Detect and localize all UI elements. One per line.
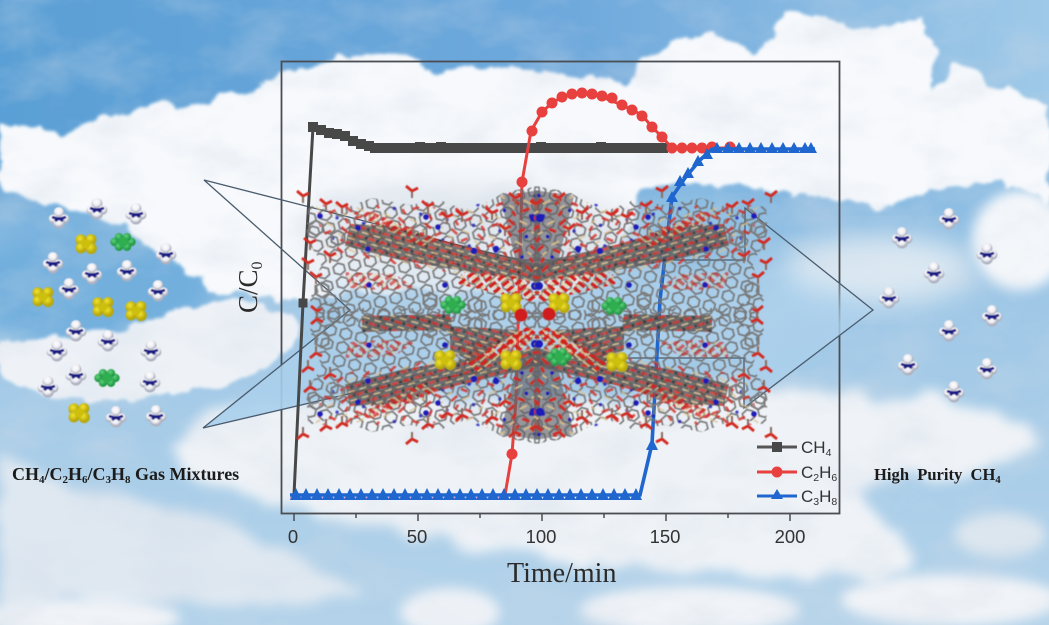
legend entry: C3H8 (757, 487, 837, 508)
x axis tick labels: 200 (775, 526, 805, 547)
x axis tick labels (288, 526, 805, 547)
left caption: 2 (62, 474, 68, 486)
x axis ticks (294, 513, 790, 521)
legend entry: CH4: CH (801, 438, 826, 457)
lower middle cloud (174, 384, 1040, 574)
shaded cloud core (300, 185, 640, 285)
legend entry: C2H6: C (801, 463, 813, 482)
left caption: Gas Mixtures (131, 464, 239, 484)
legend entry: CH4 (757, 438, 832, 459)
chart series (290, 88, 817, 500)
legend entry: C3H8: C (801, 487, 813, 506)
right caption: 4 (995, 475, 1001, 486)
bottom left cloud (0, 450, 360, 607)
left caption: /C (87, 464, 106, 484)
left caption: 3 (106, 474, 112, 486)
legend entry: C2H6: 6 (831, 472, 837, 484)
x axis tick labels: 50 (407, 526, 427, 547)
series: C3H8 (290, 142, 817, 500)
x axis tick labels: 0 (288, 526, 298, 547)
legend entry: C3H8: 8 (831, 496, 837, 508)
right cloud (972, 190, 1049, 290)
bottom strip clouds (0, 598, 180, 625)
left caption: 8 (125, 474, 131, 486)
left caption: H (68, 464, 82, 484)
legend entry: C3H8: 3 (813, 496, 819, 508)
right caption: High Purity CH (874, 465, 995, 484)
series: C2H6 (505, 88, 740, 495)
pore guest molecules (434, 293, 628, 372)
legend entry: C2H6: H (819, 463, 831, 482)
x axis tick labels: 150 (650, 526, 680, 547)
y axis title: 0 (249, 261, 266, 269)
x axis tick labels: 100 (526, 526, 556, 547)
blue sky patch left (0, 223, 220, 347)
legend entry: C3H8: H (819, 487, 831, 506)
right purified methane molecules (879, 208, 1002, 402)
left caption: 4 (39, 474, 45, 486)
left caption: /C (44, 464, 62, 484)
metal-organic framework structure (297, 186, 777, 444)
left caption: H (111, 464, 125, 484)
series: CH4 (294, 122, 668, 495)
right mid cloud (785, 236, 975, 304)
y axis title: C/C (233, 269, 263, 313)
legend entry: C2H6: 2 (813, 472, 819, 484)
x axis title: Time/min (507, 558, 616, 589)
left gas mixture molecules (32, 198, 176, 428)
lower sky (0, 130, 1049, 625)
chart frame (282, 62, 840, 514)
upper cloud bank (0, 13, 1049, 300)
left caption: 6 (82, 474, 88, 486)
blue sky patch right of centre (628, 187, 752, 263)
left caption: CH (12, 464, 39, 484)
legend entry: CH4: 4 (826, 447, 832, 459)
legend (757, 438, 837, 508)
legend entry: C2H6 (757, 463, 837, 484)
big translucent arrow (203, 180, 873, 428)
mid left cloud (0, 300, 300, 401)
